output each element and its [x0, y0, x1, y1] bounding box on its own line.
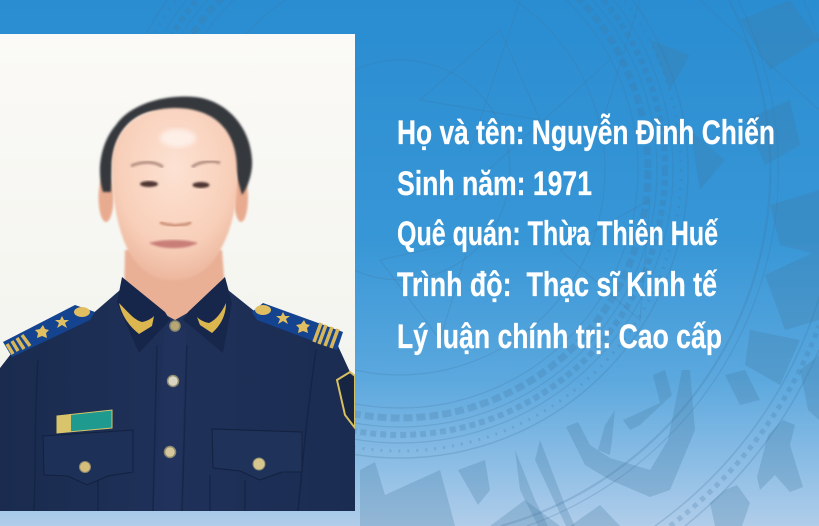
left collar: [117, 277, 170, 353]
right ear: [234, 174, 248, 222]
left ear: [98, 174, 114, 222]
education: Trình độ: Thạc sĩ Kinh tế: [397, 266, 717, 304]
nose: [160, 222, 191, 226]
hair: [100, 96, 252, 195]
left epaulette: [3, 305, 95, 357]
mouth: [149, 240, 198, 248]
shirt shading: [34, 345, 316, 511]
birth year: Sinh năm: 1971: [397, 165, 592, 203]
left epaulette stripes: [7, 335, 30, 354]
right collar: [183, 277, 232, 353]
eyes: [140, 181, 210, 188]
right epaulette stripes: [314, 323, 338, 348]
right epaulette stars: [255, 305, 310, 333]
shirt placket: [154, 330, 186, 511]
right collar wing: [197, 303, 226, 333]
pocket buttons: [80, 458, 265, 472]
left collar wing: [119, 303, 154, 334]
sleeve patch: [337, 372, 355, 428]
shirt buttons: [164, 321, 180, 458]
name badge: [57, 410, 112, 433]
left pocket: [43, 430, 133, 485]
badge emblem: [57, 414, 71, 433]
uniform shirt: [0, 290, 355, 511]
panel: portrait photo: [0, 34, 355, 511]
neck: [124, 250, 226, 322]
right epaulette: [252, 303, 343, 350]
face: [112, 108, 237, 280]
political theory: Lý luận chính trị: Cao cấp: [397, 318, 722, 356]
left epaulette stars: [35, 307, 90, 338]
birds and figures: [566, 370, 695, 497]
forehead highlight: [160, 129, 196, 147]
eyebrows: [131, 161, 220, 167]
right pocket: [212, 429, 302, 480]
text block: personal details: [397, 114, 775, 356]
